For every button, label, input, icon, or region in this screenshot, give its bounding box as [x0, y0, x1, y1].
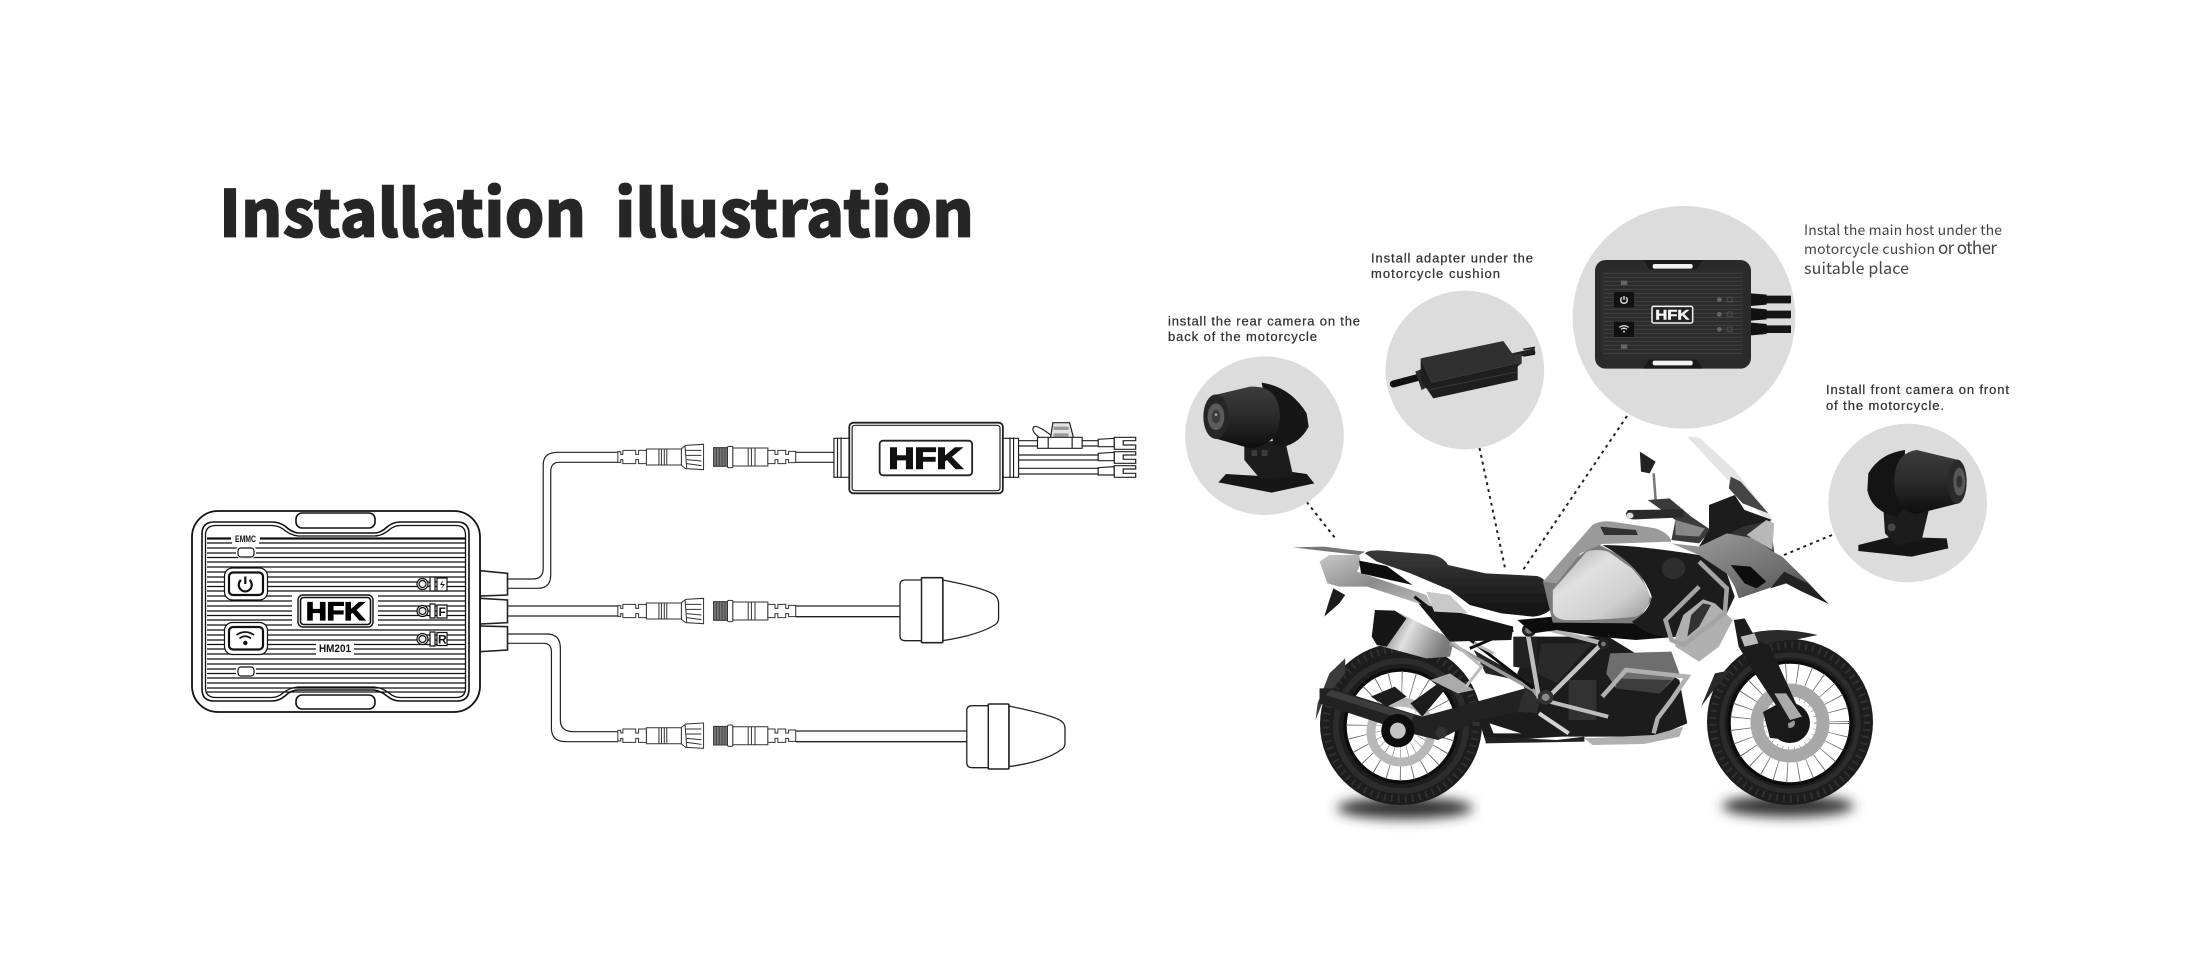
host product — [1595, 260, 1791, 369]
front wheel — [1707, 639, 1873, 805]
caption: rear camera: install the rear camera on the — [1168, 314, 1360, 329]
rear wheel — [1320, 643, 1482, 805]
title: illustration — [615, 162, 974, 256]
host mount tabs — [296, 513, 375, 709]
host fins — [202, 522, 469, 701]
rear mudguard and tyre hugger — [1316, 658, 1345, 720]
under-seat panel — [1418, 603, 1513, 642]
status LEDs — [417, 577, 447, 646]
host logo: HFK: HFK — [306, 598, 365, 626]
title: Installation — [219, 162, 586, 256]
adapter logo: HFK: HFK — [889, 441, 962, 475]
photo circle: adapter — [1385, 291, 1544, 449]
handlebar controls — [1626, 495, 1774, 553]
status LEDs: R — [438, 632, 447, 646]
model label: HM201: HM201 — [319, 643, 351, 655]
status LEDs: F — [438, 605, 446, 619]
wiring diagram — [480, 444, 796, 748]
motorcycle body — [1293, 437, 1829, 747]
adapter wires and fuse — [1019, 423, 1136, 477]
captions — [1168, 220, 2009, 413]
indicator slots — [236, 546, 256, 677]
front camera product — [1858, 450, 1967, 557]
caption: front camera — [1826, 382, 2009, 413]
photo circle: main host — [1573, 206, 1795, 429]
host photo logo: HFK — [1652, 306, 1693, 323]
wifi button — [224, 622, 268, 654]
front fender and fork — [1701, 618, 1818, 723]
caption: front camera: of the motorcycle. — [1826, 398, 1944, 413]
line drawing: front camera — [796, 578, 999, 643]
fuel tank — [1517, 521, 1735, 640]
caption: main host: or other — [1938, 234, 1997, 259]
power button — [224, 568, 268, 600]
caption: adapter — [1371, 251, 1533, 281]
rear camera product — [1203, 383, 1314, 493]
windscreen — [1687, 437, 1772, 520]
adapter product — [1393, 341, 1535, 398]
front fairing — [1671, 520, 1829, 604]
caption: main host: motorcycle cushion — [1804, 239, 1935, 259]
line drawing: power adapter — [796, 423, 1136, 493]
frame joints — [1522, 623, 1609, 705]
caption: adapter: motorcycle cushion — [1371, 266, 1500, 281]
cables from host to connectors — [480, 452, 618, 742]
adapter housing — [849, 423, 1003, 493]
caption: adapter: Install adapter under the — [1371, 251, 1533, 266]
caption: front camera: Install front camera on front — [1826, 382, 2009, 397]
adapter logo: HFK — [880, 441, 972, 475]
seat — [1365, 550, 1556, 617]
motorcycle — [1293, 437, 1873, 819]
caption: main host: suitable place — [1804, 255, 1909, 279]
caption: rear camera: back of the motorcycle — [1168, 329, 1317, 344]
line drawing: main host — [192, 511, 480, 712]
swingarm — [1320, 673, 1541, 747]
connector pair: front camera line — [618, 598, 796, 624]
rear rack and subframe — [1293, 547, 1432, 617]
engine — [1474, 637, 1687, 745]
host photo logo: HFK: HFK — [1655, 306, 1689, 322]
caption: main host: Instal the main host under the — [1804, 220, 2002, 240]
host logo: HFK — [292, 594, 378, 628]
caption: main host — [1804, 220, 2002, 279]
line drawing: rear camera — [796, 704, 1065, 769]
crash bars — [1602, 562, 1733, 733]
photo circle: rear camera — [1185, 356, 1344, 515]
ground shadows — [1337, 795, 1854, 819]
photo circle: front camera — [1828, 424, 1987, 582]
mirror — [1640, 452, 1656, 500]
frame tubes — [1414, 597, 1608, 733]
connector pair: rear camera line — [618, 723, 796, 748]
label: EMMC: EMMC — [235, 534, 256, 544]
connector pair: adapter line — [618, 444, 796, 470]
exhaust — [1372, 610, 1454, 658]
dotted leader lines — [1307, 416, 1832, 570]
caption: rear camera — [1168, 314, 1360, 344]
adapter grommets — [834, 437, 1019, 478]
